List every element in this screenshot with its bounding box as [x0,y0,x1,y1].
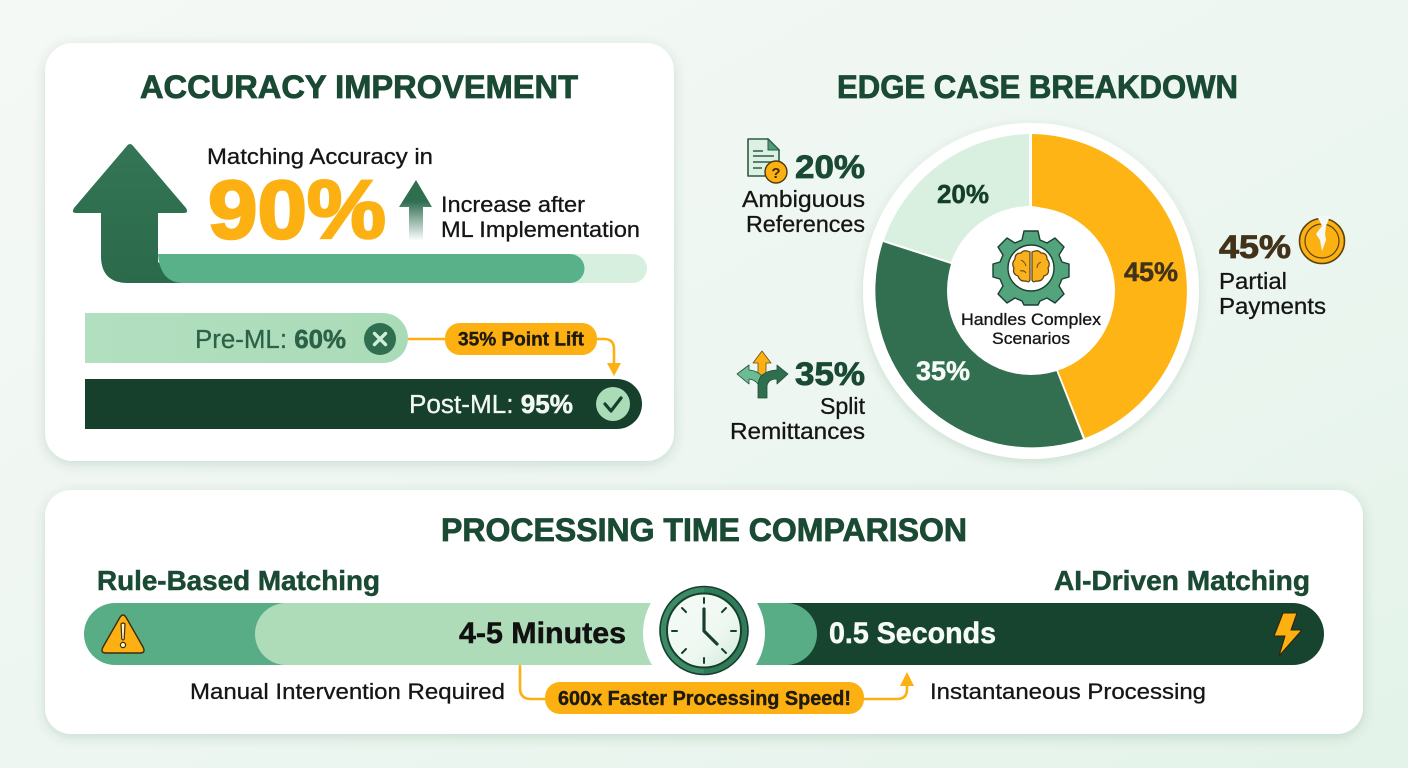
icon: lightning bolt [1274,613,1302,656]
arrow: lift connector [408,339,621,376]
heading: processing time comparison: PROCESSING TIME COMPARISON [441,512,967,548]
bar: rule-based [84,603,670,665]
panel: processing time comparison [45,490,1363,734]
legend: split remittances [730,351,865,444]
text: increase after: Increase after [441,192,586,217]
chart: edge case donut [863,123,1199,459]
icon: clock [643,572,765,694]
text: increase after: ML Implementation [441,217,640,242]
heading: accuracy improvement: ACCURACY IMPROVEMENT [140,69,578,105]
legend: split remittances: Split [820,393,865,419]
text: manual intervention required: Manual Intervention Required [190,679,505,704]
bar: pre-ML: Pre-ML: 60% [195,326,346,354]
icon: large up arrow [73,144,187,283]
segment: partial payments 45% [1032,134,1187,438]
text: increase after [441,192,640,242]
chart: edge case donut: 20% [937,179,989,209]
label: AI-driven matching: AI-Driven Matching [1054,565,1310,596]
legend: partial payments: Payments [1219,293,1326,319]
bar: AI-driven [740,603,1324,665]
callout: 600x faster [545,682,864,714]
text: matching accuracy: Matching Accuracy in [207,144,433,169]
icon: cracked coin [1300,216,1344,264]
icon: warning triangle [102,615,144,653]
progress track [159,254,647,283]
legend: ambiguous references: Ambiguous [742,186,865,212]
bar: pre-ML [85,313,408,363]
stat: 90%: 90% [208,163,386,256]
arrow: speed connector [520,665,914,699]
heading: edge case breakdown: EDGE CASE BREAKDOWN [837,69,1238,105]
text: instantaneous processing: Instantaneous Processing [930,679,1206,704]
text: handles complex scenarios [961,311,1102,348]
legend: partial payments: 45% [1219,229,1291,265]
bar: post-ML: Post-ML: 95% [409,391,573,419]
icon: gear with brain [993,231,1069,305]
legend: split remittances: Remittances [730,418,865,444]
legend: partial payments: Partial [1219,268,1287,294]
segment: split remittances 35% [875,242,1083,447]
chart: edge case donut: 45% [1124,257,1178,287]
text: handles complex scenarios: Scenarios [992,330,1070,348]
label: rule-based matching: Rule-Based Matching [97,565,380,596]
legend: split remittances: 35% [795,356,865,392]
icon: split arrows [737,351,788,398]
chart: edge case donut: 35% [916,356,970,386]
callout: 600x faster: 600x Faster Processing Speed! [558,688,851,710]
panel: accuracy improvement [45,43,674,461]
legend: partial payments [1219,216,1344,319]
legend: ambiguous references [742,139,865,237]
text: handles complex scenarios: Handles Complex [961,311,1102,329]
segment: ambiguous references 20% [884,134,1029,262]
bar: post-ML [85,379,642,429]
bar: AI-driven: 0.5 Seconds [829,617,996,650]
progress fill [158,254,584,283]
bar: rule-based: 4-5 Minutes [459,617,626,650]
legend: ambiguous references: 20% [795,149,865,185]
icon: document with question: ? [771,165,781,182]
callout: 35% point lift [445,323,597,355]
legend: ambiguous references: References [746,211,865,237]
callout: 35% point lift: 35% Point Lift [458,328,584,350]
icon: small up arrow [399,180,432,241]
